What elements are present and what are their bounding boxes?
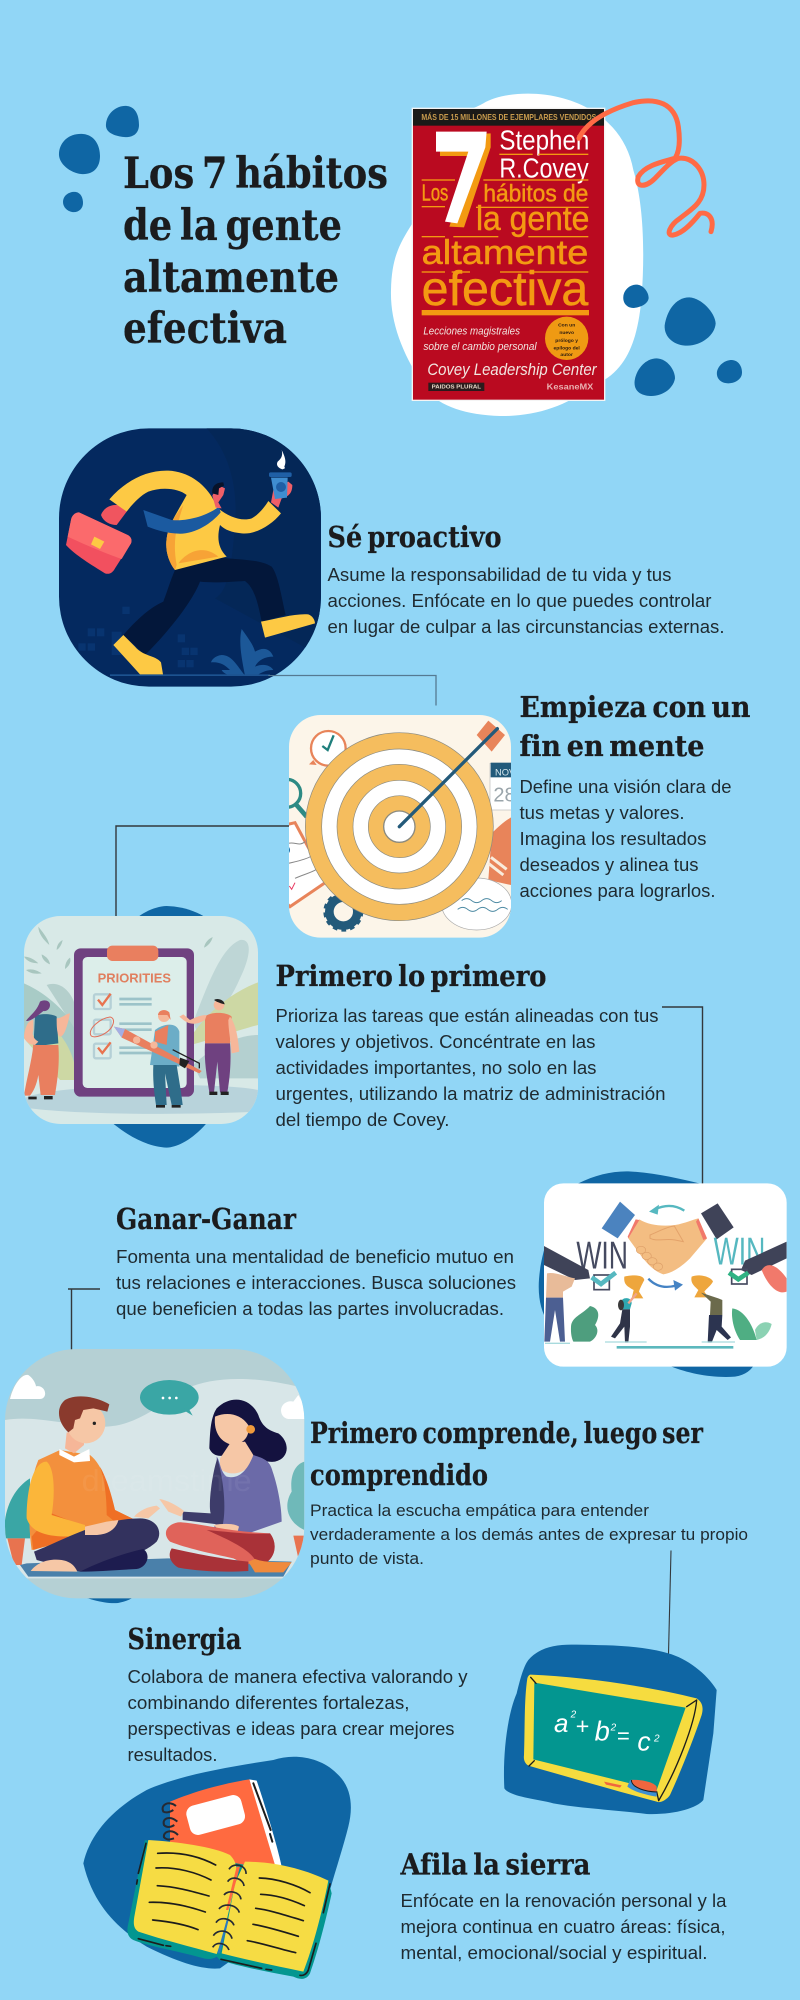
heading: Primero lo primero: Primero lo primero [276,959,546,993]
book cover: nuevo [559,330,574,336]
frame lines [529,1677,697,1801]
clock [311,731,346,766]
ground [617,1346,733,1349]
text: Sinergia: perspectivas e ideas para crear mejores [128,1718,454,1739]
orange book [488,818,511,885]
illustration: man running [55,425,325,692]
board surface [533,1683,686,1790]
text: Empieza con un fin en mente: tus metas y valores. [520,802,684,823]
arrows [655,1206,684,1211]
rug [20,1558,292,1577]
calendar [490,763,511,810]
book cover: Stephen [499,124,589,155]
magnifier [289,778,306,818]
woman left [33,1014,58,1047]
speech bubble [140,1380,199,1415]
jacket [109,471,281,570]
spiral rings [163,1803,178,1839]
center spiral [213,1865,246,1950]
blob behind [100,906,227,1148]
text: Primero lo primero: Prioriza las tareas que están alineadas con tus [276,1005,658,1026]
book cover: efectiva [422,262,589,316]
man [29,1450,133,1550]
book cover: epílogo del [554,345,580,351]
connector 2 [116,826,290,916]
heading: Sinergia: Sinergia [128,1622,242,1656]
text: Sé proactivo: acciones. Enfócate en lo que puedes controlar [328,590,712,611]
illustration: chalkboard [504,1645,717,1814]
text: Primero lo primero [276,1005,666,1130]
man right [205,1013,232,1043]
scarf [143,507,221,534]
title: Los 7 hábitos [123,149,388,199]
equation: b [595,1716,610,1747]
text: Sé proactivo [328,564,724,637]
text: Primero lo primero: urgentes, utilizando la matriz de administración [276,1083,666,1104]
text: Empieza con un fin en mente: deseados y alinea tus [520,854,698,875]
clipboard [285,823,327,907]
equation: c [637,1727,651,1757]
faint watermark: dreamstime [82,1464,252,1498]
ground [24,1085,258,1114]
text: Empieza con un fin en mente: acciones para lograrlos. [520,880,716,901]
head [212,485,225,508]
sleeves [602,1202,635,1238]
text: Primero comprende: verdaderamente a los demás antes de expresar tu propio [310,1526,748,1544]
heading: Afila la sierra: Afila la sierra [400,1848,591,1882]
book cover: altamente [422,234,588,272]
person left [546,1273,575,1298]
illustration: target [289,715,511,938]
equation: 2 [653,1733,660,1744]
teal cover [127,1840,332,1979]
equation: a [554,1708,568,1738]
lighter background band [5,1379,304,1578]
blob behind [539,1171,762,1377]
checklist [94,994,111,1058]
book cover: autor [560,352,573,358]
text: Primero lo primero: actividades importantes, no solo en las [276,1057,596,1078]
text: Empieza con un fin en mente: Imagina los resultados [520,828,706,849]
text: Primero lo primero: valores y objetivos. Concéntrate en las [276,1031,596,1052]
book cover: Con un [558,322,575,328]
heading: Primero comprende: Primero comprende, luego ser [310,1416,704,1450]
book cover: sobre el cambio personal [423,341,537,353]
connector 1 [112,676,436,706]
heading: Empieza con un fin en mente [520,690,750,763]
orange notebook [249,1779,282,1870]
plant right [732,1308,757,1340]
connector 5 [668,1550,671,1654]
page lines [137,1843,330,1975]
text: Empieza con un fin en mente: Define una visión clara de [520,776,732,797]
book cover: R.Covey [499,152,589,183]
plate [442,878,512,930]
book cover [412,108,605,401]
illustration: couple talking [0,1345,310,1608]
orange squiggle [579,101,712,235]
text: Sinergia: resultados. [128,1744,218,1765]
heading: Ganar-Ganar: Ganar-Ganar [116,1202,297,1236]
plants and pots [4,1478,30,1538]
clouds [10,1375,45,1399]
handshake [628,1218,707,1274]
book cover: PAIDOS PLURAL [432,385,482,391]
trophy left figure [624,1275,644,1298]
legs [123,558,286,655]
equation: 2 [570,1709,577,1720]
heading: Sé proactivo: Sé proactivo [328,520,502,554]
arrow [399,721,505,827]
illustration: priorities [20,905,265,1148]
briefcase [66,512,132,574]
heading: Empieza con un fin en mente: Empieza con un [520,690,750,724]
yellow pages [134,1840,237,1954]
text: Primero lo primero: del tiempo de Covey. [276,1109,450,1130]
book cover: KesaneMX [547,382,594,392]
heading: Empieza con un fin en mente: fin en mente [520,729,704,763]
text: Primero comprende [310,1502,748,1568]
illustration: priorities: PRIORITIES [98,972,171,986]
text: Ganar-Ganar: Fomenta una mentalidad de beneficio mutuo en [116,1246,514,1267]
plant left [571,1306,598,1342]
text: Sinergia: Colabora de manera efectiva valorando y [128,1666,468,1687]
target rings [305,733,493,921]
text: Primero comprende: punto de vista. [310,1550,424,1568]
board frame [524,1675,703,1802]
book cover: Lecciones magistrales [423,325,520,337]
blob behind [83,1757,351,1969]
text: Ganar-Ganar [116,1246,516,1319]
text: Afila la sierra: Enfócate en la renovación personal y la [400,1890,727,1911]
title: efectiva [123,304,287,354]
trophy right figure [691,1275,713,1297]
text: Afila la sierra: mejora continua en cuatro áreas: física, [400,1916,726,1937]
title: de la gente [123,201,342,251]
book cover: Los [422,180,448,206]
equation: = [617,1723,630,1748]
equation: + [575,1713,589,1739]
text: Sé proactivo: en lugar de culpar a las circunstancias externas. [328,616,724,637]
woman [209,1400,287,1462]
title [123,149,388,354]
heading: Primero comprende [310,1416,704,1492]
leaves [193,940,249,1032]
pencil [114,1027,202,1073]
equation: 2 [610,1723,617,1734]
title: altamente [123,253,339,303]
blob behind couple [65,1590,140,1603]
illustration: win-win [535,1170,795,1383]
book cover: hábitos de [483,181,588,208]
woman with pencil [150,1025,179,1067]
decorative blobs: top left [59,106,139,212]
coffee cup [271,482,292,508]
blue dots right of the book [623,285,742,396]
blob behind [504,1645,717,1814]
shoes [113,614,315,674]
gear [325,893,362,930]
eraser and chalk [604,1780,657,1797]
WIN labels: WIN [576,1234,628,1278]
connector 4 [68,1289,100,1350]
connector 3 [662,1007,702,1184]
clipboard [74,948,194,1097]
book cover: prólogo y [555,338,578,344]
text: Ganar-Ganar: tus relaciones e interacciones. Busca soluciones [116,1272,516,1293]
text: Sinergia [128,1666,468,1765]
text: Primero comprende: Practica la escucha empática para entender [310,1502,650,1520]
text: Sinergia: combinando diferentes fortalezas, [128,1692,410,1713]
book cover with white blob, squiggle and dots [391,94,742,416]
text: Afila la sierra: mental, emocional/social y espiritual. [400,1942,708,1963]
text: Afila la sierra [400,1890,727,1963]
illustration: win-win: WIN [714,1229,765,1273]
equation [554,1708,660,1757]
markers and checks [544,1246,590,1280]
heading: Primero comprende: comprendido [310,1458,488,1492]
illustration: target: NOV [495,767,516,777]
text: Sé proactivo: Asume la responsabilidad de tu vida y tus [328,564,672,585]
illustration: target: 28 [493,785,516,807]
book cover: la gente [476,200,589,238]
text: Ganar-Ganar: que beneficien a todas las partes involucradas. [116,1298,504,1319]
book cover: MÁS DE 15 MILLONES DE EJEMPLARES VENDIDOS [421,112,597,122]
text: Empieza con un fin en mente [520,776,732,901]
white blob behind the book [391,94,643,416]
book cover: Covey Leadership Center [427,360,598,379]
illustration: notebooks [83,1757,351,1979]
